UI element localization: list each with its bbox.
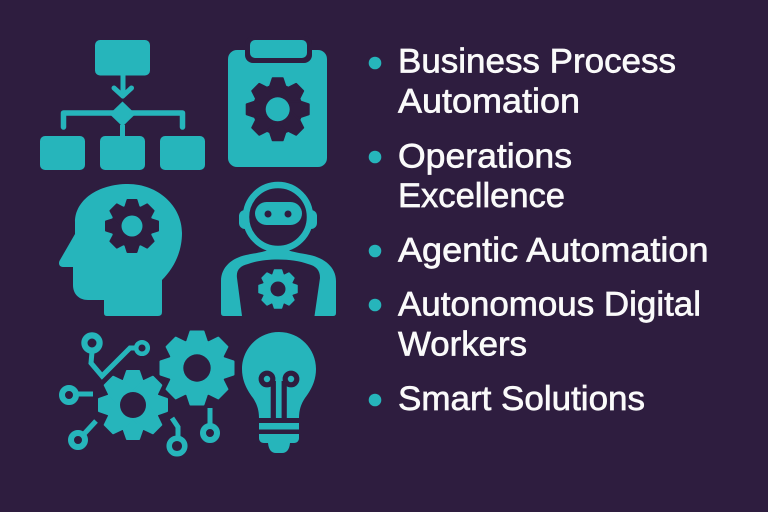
list item: Smart Solutions: Smart Solutions [398, 380, 645, 418]
icon: process flowchart [40, 40, 205, 170]
list item: Autonomous Digital Workers: Autonomous Digital [398, 286, 701, 324]
list item: Agentic Automation: Agentic Automation [398, 232, 708, 270]
list item: Autonomous Digital Workers: Workers [398, 326, 527, 364]
list item: Operations Excellence [369, 138, 572, 215]
list item: Business Process Automation [369, 42, 676, 120]
list item: Autonomous Digital Workers [369, 286, 701, 364]
list item: Operations Excellence: Operations [398, 138, 572, 176]
icon: head with gear [59, 184, 182, 316]
icon: robot with gear [221, 185, 336, 316]
bullet list [369, 42, 708, 418]
icon: clipboard with gear [228, 36, 327, 167]
list item: Business Process Automation: Business Process [398, 42, 676, 80]
list item: Operations Excellence: Excellence [398, 177, 565, 215]
icon: light bulb [242, 332, 316, 453]
icon: gears and circuit nodes [62, 332, 234, 454]
list item: Business Process Automation: Automation [398, 82, 580, 120]
